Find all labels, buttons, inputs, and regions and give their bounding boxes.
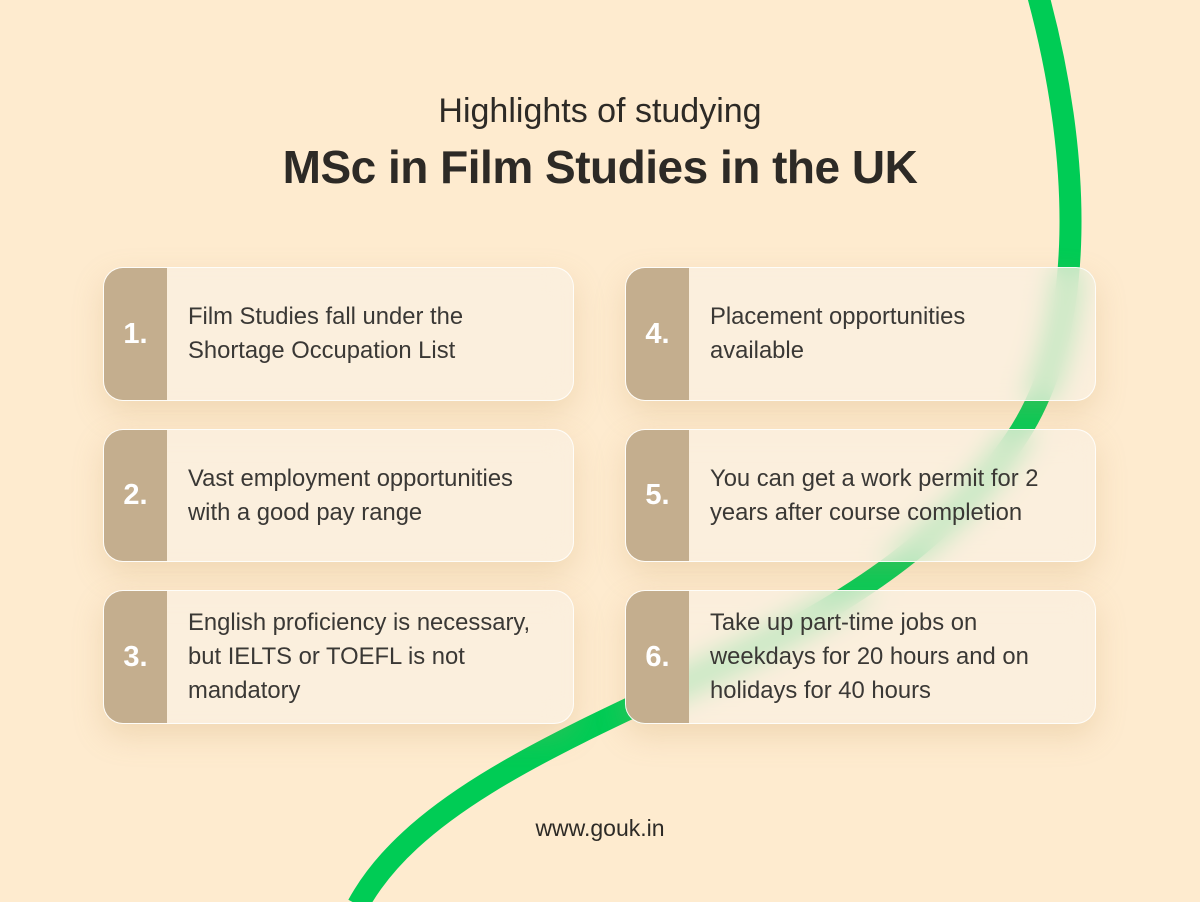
card 4: Placement opportunities bbox=[710, 303, 965, 330]
card 2: 2. bbox=[123, 479, 148, 511]
card 5 bbox=[625, 429, 1096, 562]
card 6: Take up part-time jobs on bbox=[710, 609, 977, 636]
card 4 bbox=[625, 267, 1096, 401]
card 4: 4. bbox=[645, 318, 670, 350]
card 4: available bbox=[710, 337, 804, 364]
subtitle: MSc in Film Studies in the UK bbox=[283, 141, 917, 193]
title: Highlights of studying bbox=[438, 92, 762, 130]
card 1: Film Studies fall under the bbox=[188, 303, 463, 330]
card 1: Shortage Occupation List bbox=[188, 337, 455, 364]
card 3: but IELTS or TOEFL is not bbox=[188, 643, 465, 670]
card 2: with a good pay range bbox=[188, 498, 422, 526]
card 5: 5. bbox=[645, 479, 670, 511]
card 2: Vast employment opportunities bbox=[188, 464, 513, 492]
card 3: 3. bbox=[123, 640, 148, 672]
card 6: holidays for 40 hours bbox=[710, 677, 931, 704]
card 5: years after course completion bbox=[710, 498, 1022, 526]
card 3 bbox=[103, 590, 574, 724]
card 3: English proficiency is necessary, bbox=[188, 609, 530, 636]
card 6 bbox=[625, 590, 1096, 724]
card 5: You can get a work permit for 2 bbox=[710, 464, 1038, 492]
card 1 bbox=[103, 267, 574, 401]
card 1: 1. bbox=[123, 318, 148, 350]
card 6: 6. bbox=[645, 640, 670, 672]
card 3: mandatory bbox=[188, 677, 300, 704]
footer url: www.gouk.in bbox=[535, 815, 665, 841]
card 6: weekdays for 20 hours and on bbox=[710, 643, 1029, 670]
card 2 bbox=[103, 429, 574, 562]
